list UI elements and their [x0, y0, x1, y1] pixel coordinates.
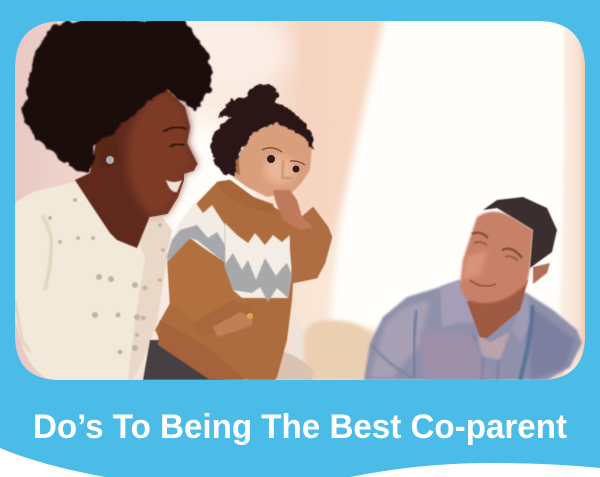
room background [15, 5, 588, 380]
sleeve cuff [197, 302, 249, 322]
title: Do’s To Being The Best Co-parent [33, 408, 567, 446]
shoulder grey band [167, 225, 225, 263]
child sweater [155, 180, 332, 380]
sweater collar [216, 179, 275, 208]
left collar [440, 279, 474, 327]
left sleeve [168, 238, 243, 304]
child head [233, 122, 312, 197]
father [364, 197, 582, 380]
child legs [143, 340, 225, 380]
chest white band [225, 223, 292, 298]
child [143, 84, 332, 380]
child hair [210, 84, 313, 176]
photo: family [15, 5, 588, 380]
right cuff [290, 207, 332, 283]
mother sweater [15, 182, 130, 380]
bottom wave [0, 448, 600, 477]
shoulder white band [167, 202, 225, 262]
mother's hand [274, 352, 314, 380]
chest grey diamonds [223, 253, 292, 302]
father ear [533, 263, 550, 284]
mother [15, 18, 212, 380]
cardigan panel [128, 218, 172, 380]
father hair [483, 197, 557, 268]
sweater beads [48, 198, 165, 354]
mother ear and earring [100, 164, 114, 167]
father neck and face [467, 280, 528, 338]
child small hand [213, 312, 253, 337]
mother hair [22, 18, 212, 173]
mother neck and face [75, 88, 197, 248]
hem [158, 320, 246, 380]
father shirt [364, 280, 582, 380]
child fist at mouth [273, 190, 313, 230]
right collar [512, 296, 530, 342]
